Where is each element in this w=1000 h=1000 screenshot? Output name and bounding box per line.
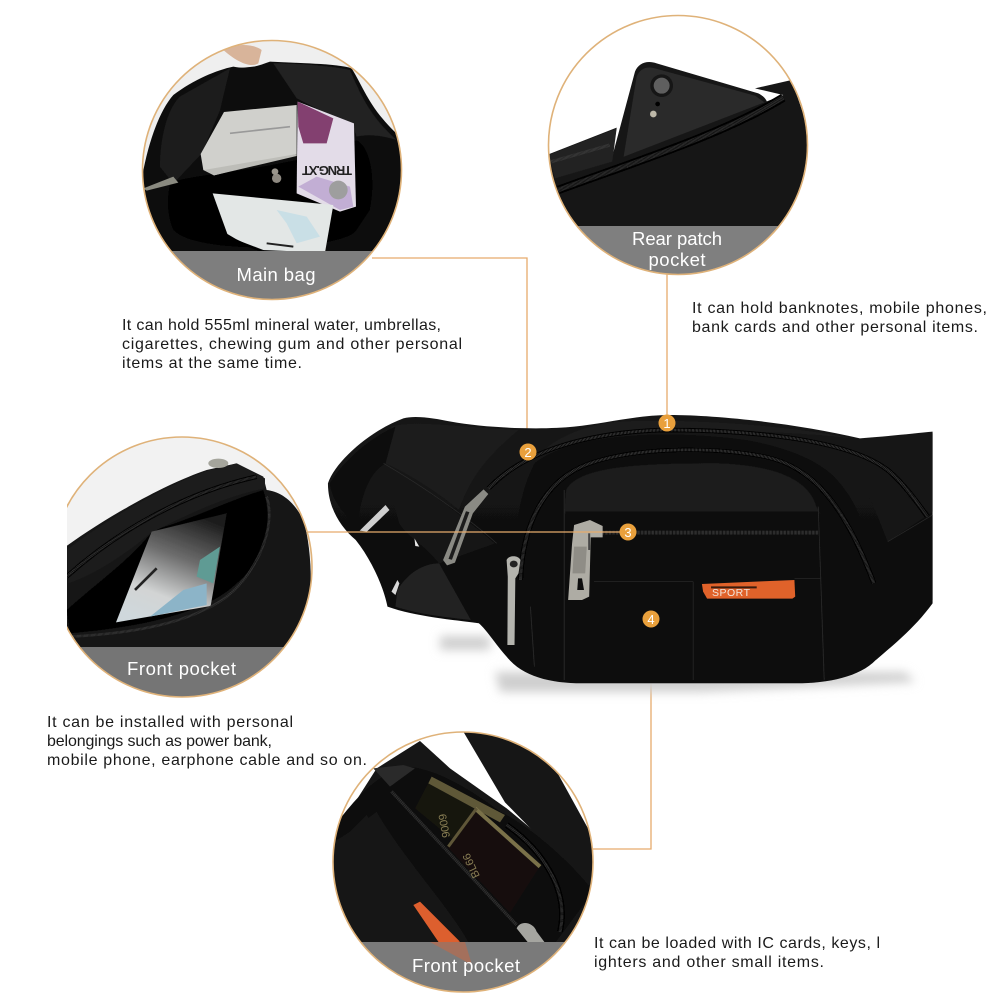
marker 4 <box>642 610 660 628</box>
studs <box>272 174 281 183</box>
label: front pocket: Front pocket <box>127 658 236 679</box>
text block: left front pocket description <box>47 714 367 769</box>
bag silhouette <box>328 415 933 683</box>
zipper pull <box>143 177 178 191</box>
front zipper band <box>565 512 821 553</box>
text block: left front pocket description: mobile phone, earphone cable and so on. <box>47 752 367 769</box>
strap fold <box>384 463 495 563</box>
connector line: main bag to marker 2 <box>372 258 527 445</box>
phone card <box>297 102 356 212</box>
card print: back card: 9009 <box>437 813 453 839</box>
main waist bag photo illustration <box>328 415 933 692</box>
text block: main bag description: It can hold 555ml mineral water, umbrellas, <box>122 317 441 334</box>
panel: front pocket circle (bottom) <box>330 730 597 1000</box>
label: rear patch pocket: Rear patch <box>632 228 722 249</box>
text block: bottom front pocket description: It can be loaded with IC cards, keys, l <box>594 935 880 952</box>
sport label <box>702 580 795 599</box>
ground shadow <box>440 636 915 692</box>
open pocket interior <box>67 490 268 633</box>
label band <box>578 226 778 274</box>
card print: front card: BL66 <box>461 851 483 880</box>
sport label text: SPORT <box>712 587 751 599</box>
text block: main bag description: items at the same time. <box>122 355 302 372</box>
key card back <box>415 784 474 838</box>
marker 2: 2 <box>524 445 532 460</box>
phone <box>612 62 767 162</box>
marker 2 <box>520 444 536 460</box>
label: front pocket: Front pocket <box>412 955 520 976</box>
zippers <box>67 477 257 577</box>
front flap <box>67 463 265 583</box>
text block: main bag description <box>122 317 462 372</box>
label band <box>172 251 372 299</box>
panel: rear patch pocket circle <box>545 14 812 276</box>
marker 4: 4 <box>647 612 655 627</box>
key card front <box>447 808 540 913</box>
zipper pull <box>516 923 544 942</box>
strap <box>463 732 595 885</box>
zippers <box>489 430 927 517</box>
card print: TRNG.XT <box>302 163 352 178</box>
zipper pull: large <box>568 520 603 600</box>
zipper pull: small <box>507 556 520 645</box>
camera <box>650 74 673 97</box>
text block: rear patch pocket description <box>692 300 987 336</box>
connector line: bottom front pocket to marker 4 <box>592 625 651 849</box>
pocket fabric <box>545 80 812 232</box>
text block: rear patch pocket description: bank cards and other personal items. <box>692 319 978 336</box>
text block: left front pocket description: It can be installed with personal <box>47 714 293 731</box>
text block: rear patch pocket description: It can hold banknotes, mobile phones, <box>692 300 987 317</box>
buckle <box>360 505 389 532</box>
marker 1: 1 <box>663 416 671 431</box>
marker 3 <box>620 524 636 540</box>
open bag <box>140 62 405 257</box>
mesh back panel <box>395 563 471 620</box>
zipper <box>558 98 783 190</box>
zipper stud <box>208 459 228 468</box>
text block: bottom front pocket description: ighters and other small items. <box>594 954 824 971</box>
ring <box>548 16 808 274</box>
connector line: rear patch pocket to marker 1 <box>666 273 668 416</box>
zippers <box>392 792 517 925</box>
connector line: front pocket to marker 3 <box>308 531 622 533</box>
orange label <box>413 902 460 947</box>
zipper pull: side <box>443 489 488 565</box>
text block: left front pocket description: belongings such as power bank, <box>47 733 272 750</box>
ring <box>333 732 593 992</box>
text block: bottom front pocket description <box>594 935 880 971</box>
label: rear patch pocket <box>632 228 722 270</box>
panel: front pocket circle (left) <box>50 435 315 700</box>
finger <box>223 45 262 65</box>
label: main bag: Main bag <box>236 264 316 285</box>
label band <box>362 942 564 992</box>
bag body <box>334 741 591 942</box>
label: rear patch pocket: pocket <box>648 249 706 270</box>
ring <box>142 40 402 300</box>
bag <box>63 463 311 650</box>
seams <box>384 463 933 680</box>
marker 1 <box>658 414 676 432</box>
text block: main bag description: cigarettes, chewing gum and other personal <box>122 336 462 353</box>
ring <box>52 437 312 697</box>
body panels <box>515 434 873 682</box>
card <box>116 513 227 622</box>
label band <box>80 647 284 696</box>
powerbank <box>201 105 297 175</box>
panel: main bag circle <box>140 38 405 303</box>
booklet <box>213 193 333 253</box>
marker 3: 3 <box>624 525 632 540</box>
